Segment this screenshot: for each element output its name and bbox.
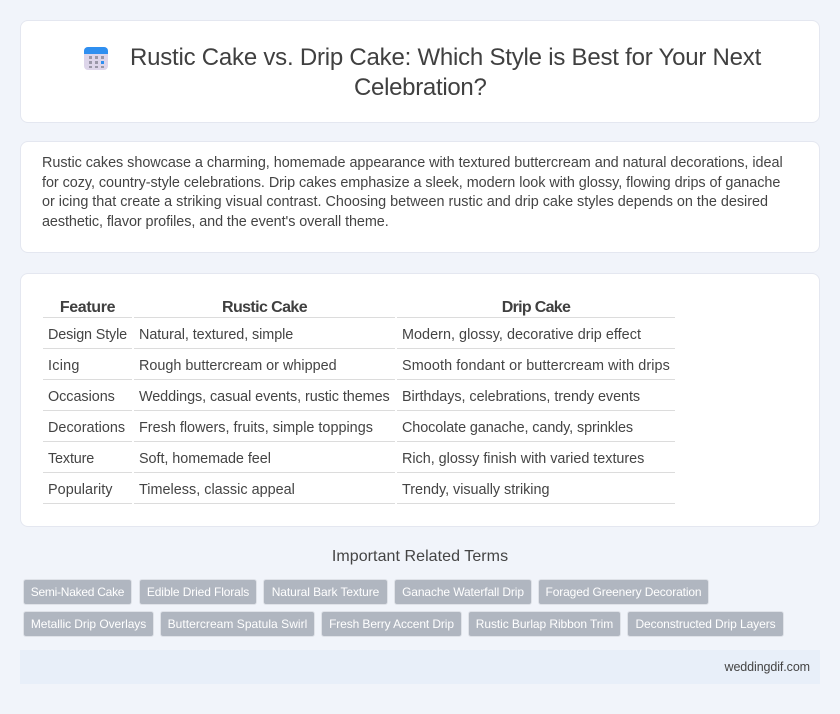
related terms tags: Fresh Berry Accent Drip [329,617,454,631]
comparison table: Popularity [48,482,112,498]
footer source: weddingdif.com [725,660,810,674]
comparison table: Rustic Cake [222,299,307,316]
comparison table panel [20,273,820,527]
intro text: or icing that create a striking visual contrast. Choosing between rustic and drip cake styles depends on the desired [42,194,768,210]
comparison table: Birthdays, celebrations, trendy events [402,389,640,405]
header panel [20,20,820,123]
comparison table [43,299,675,504]
title: Rustic Cake vs. Drip Cake: Which Style is Best for Your Next [130,44,761,71]
comparison table: Soft, homemade feel [139,451,271,467]
related terms tags: Buttercream Spatula Swirl [168,617,307,631]
comparison table: Timeless, classic appeal [139,482,295,498]
related terms tags: Metallic Drip Overlays [31,617,146,631]
comparison table: Rich, glossy finish with varied textures [402,451,644,467]
comparison table: Chocolate ganache, candy, sprinkles [402,420,633,436]
title: Celebration? [354,74,486,101]
comparison table: Modern, glossy, decorative drip effect [402,327,641,343]
intro text [42,155,783,230]
intro text: for cozy, country-style celebrations. Drip cakes emphasize a sleek, modern look with glossy, flowing drips of ganache [42,175,780,191]
comparison table: Drip Cake [502,299,570,316]
comparison table: Texture [48,451,94,467]
related terms tags: Natural Bark Texture [272,585,379,599]
related terms tags: Semi-Naked Cake [31,585,124,599]
comparison table: Weddings, casual events, rustic themes [139,389,390,405]
footer bar [20,650,820,684]
comparison table: Rough buttercream or whipped [139,358,337,374]
comparison table: Occasions [48,389,115,405]
comparison table: Icing [48,358,80,374]
related terms tags: Foraged Greenery Decoration [546,585,701,599]
related terms tags: Deconstructed Drip Layers [635,617,776,631]
intro panel [20,141,820,253]
title [130,44,762,101]
intro text: aesthetic, flavor profiles, and the event's overall theme. [42,214,389,230]
comparison table: Design Style [48,327,127,343]
comparison table: Fresh flowers, fruits, simple toppings [139,420,373,436]
comparison table: Trendy, visually striking [402,482,549,498]
comparison table: Decorations [48,420,125,436]
comparison table: Natural, textured, simple [139,327,293,343]
intro text: Rustic cakes showcase a charming, homemade appearance with textured buttercream and natural decorations, ideal [42,155,783,171]
related terms tags: Ganache Waterfall Drip [402,585,524,599]
comparison table: Smooth fondant or buttercream with drips [402,358,670,374]
related terms heading: Important Related Terms [332,548,508,565]
icon: calendar [84,47,108,70]
related terms tags: Edible Dried Florals [147,585,249,599]
related terms tags: Rustic Burlap Ribbon Trim [476,617,613,631]
table header: feature: Feature [60,299,115,316]
